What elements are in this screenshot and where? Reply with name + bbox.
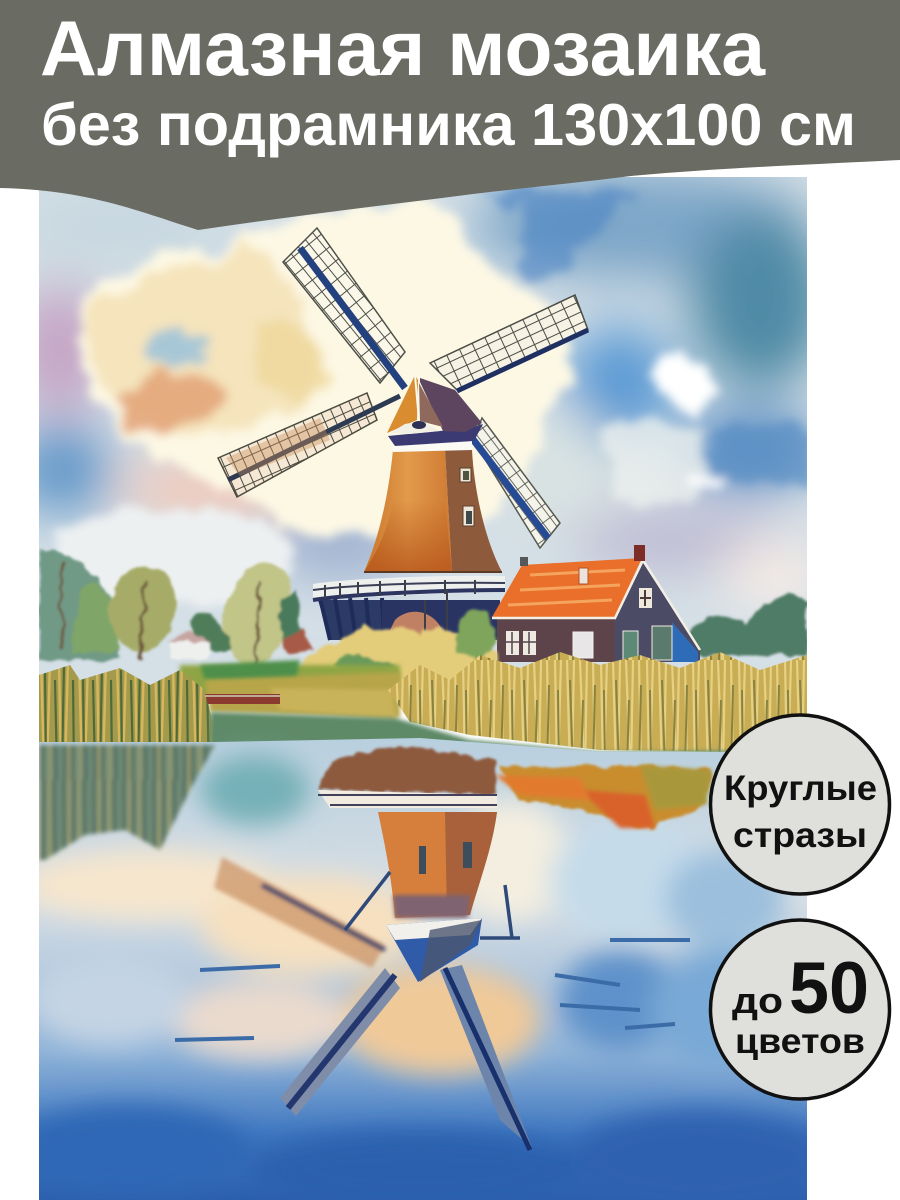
badge: up to 50 colours: до (732, 980, 783, 1021)
badge: up to 50 colours (710, 920, 890, 1099)
subtitle: без подрамника 130х100 см (41, 92, 856, 158)
header banner (0, 0, 900, 230)
badge: up to 50 colours: цветов (735, 1022, 865, 1061)
painting: reeds and foreground grass (39, 608, 807, 770)
badge: round rhinestones (710, 715, 890, 894)
badge: round rhinestones: стразы (733, 816, 867, 855)
windmill ring (388, 424, 483, 446)
blade: upper right (430, 295, 588, 391)
reflection: blade left (214, 857, 385, 968)
title: Алмазная мозаика (40, 4, 766, 92)
painting: windmill by the water (10, 170, 830, 1200)
painting: windmill tower (364, 375, 502, 573)
painting: blades of the windmill (218, 228, 588, 548)
blade: upper left (283, 228, 405, 388)
badge: round rhinestones: Круглые (724, 769, 877, 808)
white band (393, 441, 472, 452)
windmill cap (387, 375, 418, 433)
reflection: cap (386, 918, 482, 982)
painting: house (492, 545, 700, 662)
cloud masses (50, 190, 810, 610)
reflection: tower (378, 812, 497, 918)
painting: water (10, 738, 830, 1200)
painting: distant trees and bushes (39, 548, 807, 670)
blade: left (218, 393, 400, 497)
painting: sky (10, 170, 830, 697)
blade: lower right (472, 418, 560, 548)
painting: windmill gallery and supports (313, 576, 505, 640)
reflection: lower blades (280, 968, 400, 1116)
painting: mill reflection (175, 745, 690, 1150)
badge: up to 50 colours: 50 (789, 948, 869, 1029)
reflection: reeds (39, 745, 215, 860)
